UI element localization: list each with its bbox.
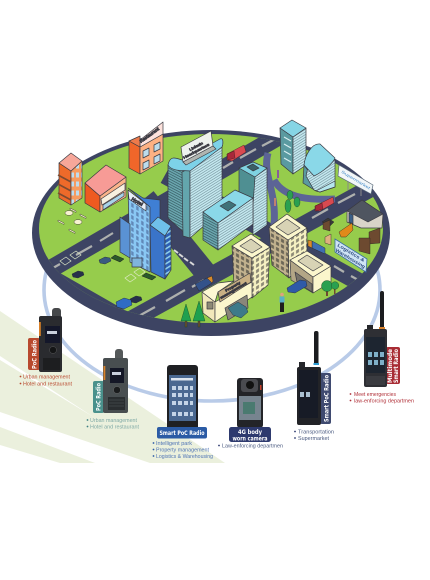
van <box>195 276 213 291</box>
tag text: PoC Radio <box>32 340 38 369</box>
device 4: 4G body worn camera: worn camera <box>232 436 268 442</box>
green ground and roads <box>39 134 383 323</box>
building: restaurant <box>129 122 163 174</box>
blue truck <box>308 240 325 254</box>
disc base <box>32 130 390 336</box>
billboard: logistics & warehousing <box>334 239 367 272</box>
device 3: Smart PoC Radio <box>157 365 207 438</box>
restaurant sign text: Restaurant <box>139 126 161 144</box>
device 1 uses: Hotel and restaurant <box>23 382 72 388</box>
device 6: Multimode Smart Radio: Smart Radio <box>393 349 400 383</box>
building: right tower <box>280 120 306 174</box>
building: hotel <box>120 188 171 279</box>
billboard: top right <box>338 165 373 196</box>
trees: right lawn <box>322 280 339 296</box>
background: pale green light rays <box>0 311 225 463</box>
tag text: Multimode <box>387 349 394 383</box>
pedestrians on path <box>274 170 279 206</box>
tag <box>229 427 271 442</box>
device 5: Smart PoC Radio <box>297 331 331 425</box>
truck on upper road <box>227 145 246 161</box>
device 4: 4G body worn camera <box>229 378 271 442</box>
tag text: Smart PoC Radio <box>324 375 330 422</box>
billboard text: Supermarket <box>340 170 372 191</box>
building: orange tower <box>58 153 82 205</box>
outdoor tables <box>58 208 86 234</box>
building: shop <box>85 165 126 212</box>
tan building: low wing <box>290 251 331 293</box>
city disc <box>30 124 400 337</box>
device 4 uses: Law-enforcing departmen <box>222 444 283 450</box>
building: headquarters tower <box>168 131 223 238</box>
red pickup <box>315 197 334 211</box>
person <box>280 293 284 312</box>
tan building: property management <box>202 273 252 322</box>
device 5 uses: Transportation <box>298 430 334 436</box>
tag text: PoC Radio <box>96 383 102 411</box>
tan building: left tower <box>232 234 270 298</box>
tan building: property management: management <box>220 281 248 300</box>
hedges <box>111 255 156 280</box>
billboard text: Logistics & <box>336 243 366 263</box>
parking bays <box>60 251 145 282</box>
device 6 uses: Meet emergencies <box>354 392 396 398</box>
device 3 uses: Logistics & Warehousing <box>156 454 213 460</box>
device 5 uses: Supermarket <box>298 436 329 442</box>
device 2 uses: Urban management <box>90 418 137 424</box>
tan building: rear tower <box>269 214 307 278</box>
device 5 uses <box>294 430 334 442</box>
phone <box>167 365 198 430</box>
building: teal tower behind <box>239 162 267 235</box>
logistics yard <box>322 218 380 254</box>
tag text: 4G body <box>238 429 262 436</box>
tag <box>386 347 400 384</box>
property management sign text: Property <box>224 281 241 293</box>
device 3 uses <box>153 441 213 460</box>
cars by tan buildings <box>228 280 307 318</box>
device 2: PoC Radio <box>93 349 128 413</box>
parked cars <box>72 257 142 309</box>
warehouse <box>347 200 383 228</box>
device 6 uses: law-enforcing departmen <box>354 398 414 404</box>
billboard: logistics & warehousing: Warehousing <box>334 248 366 269</box>
building: round office <box>303 144 335 192</box>
device 2 uses <box>87 418 139 430</box>
trees near path <box>285 190 300 212</box>
device 6 uses <box>350 392 414 404</box>
trees: left lawn <box>181 301 205 327</box>
device 1 uses: Urban management <box>23 374 70 380</box>
device 3 uses: Property management <box>156 448 209 454</box>
radio <box>103 349 128 413</box>
radio <box>364 291 387 387</box>
tag <box>320 373 331 424</box>
tag <box>157 427 207 438</box>
hotel sign text: Hotel <box>130 197 144 208</box>
device 1: PoC Radio <box>28 308 62 372</box>
building: headquarters tower: Headquarters <box>183 143 210 160</box>
tag text: Smart PoC Radio <box>160 430 204 437</box>
device 2 uses: Hotel and restaurant <box>90 424 139 430</box>
connecting arc behind devices <box>44 179 380 401</box>
building: low office block <box>203 190 253 250</box>
device 3 uses: Intelligent park <box>156 441 192 447</box>
device 6: Multimode Smart Radio <box>364 291 400 387</box>
camera <box>237 378 263 428</box>
tag <box>28 338 40 370</box>
tag <box>93 381 104 413</box>
device 1 uses <box>20 374 72 388</box>
headquarters sign text: Linkwin <box>189 141 204 152</box>
radio <box>297 331 321 425</box>
radio <box>39 308 62 372</box>
